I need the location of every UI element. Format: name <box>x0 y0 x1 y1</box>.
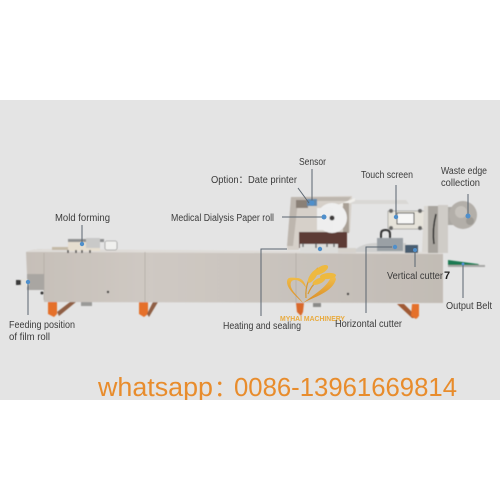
leader: paper roll <box>282 216 323 218</box>
label: waste edge collection line 2: collection <box>441 178 480 189</box>
leader: horizontal cutter <box>366 247 392 313</box>
brand logo <box>280 263 345 323</box>
photo background band <box>0 100 500 400</box>
leader: mold forming <box>81 225 83 243</box>
label: medical dialysis paper roll: Medical Dialysis Paper roll <box>171 213 274 224</box>
leader lines with blue markers <box>28 169 468 316</box>
phone number: 0086-13961669814 <box>234 374 457 402</box>
leader: feeding position <box>27 282 29 315</box>
label: horizontal cutter: Horizontal cutter <box>335 319 403 330</box>
label: output belt: Output Belt <box>446 301 492 312</box>
label: feeding position: Feeding position <box>9 320 75 331</box>
logo heart <box>287 274 336 303</box>
panel seams <box>44 252 296 303</box>
white lower band <box>0 400 500 500</box>
body screws <box>40 291 349 295</box>
logo wordmark: MYHAI MACHINERY <box>280 316 345 323</box>
sealing station frame <box>287 196 409 253</box>
leader: vertical cutter <box>414 250 416 267</box>
whatsapp contact <box>97 374 457 402</box>
leader: touch screen <box>395 185 397 217</box>
label: waste edge collection: Waste edge <box>441 166 487 177</box>
label: heating and sealing: Heating and sealing <box>223 321 301 332</box>
label: sensor: Sensor <box>299 157 327 168</box>
label: option date printer: Option：Date printer <box>211 175 298 186</box>
top rail <box>26 249 443 254</box>
leader: sensor <box>311 169 313 202</box>
label: vertical cutter: Vertical cutter <box>387 271 444 282</box>
output belt <box>448 260 485 267</box>
label: touch screen: Touch screen <box>361 170 413 181</box>
label: mold forming: Mold forming <box>55 213 110 224</box>
leader: date printer <box>298 188 309 203</box>
blue marker dots <box>26 200 471 284</box>
waste edge collection unit <box>422 201 477 253</box>
mold forming unit <box>52 238 117 253</box>
leader: output belt <box>462 264 464 298</box>
callout labels <box>9 157 492 343</box>
touch screen panel <box>388 209 425 230</box>
film roll feeder <box>16 274 44 290</box>
horizontal cutter unit <box>356 230 418 253</box>
leader: waste edge <box>467 194 469 216</box>
logo wheat <box>306 263 336 298</box>
leader: heating and sealing <box>261 249 287 316</box>
whatsapp word: whatsapp <box>97 374 213 402</box>
machine base body <box>26 249 443 303</box>
machine photo <box>16 196 485 319</box>
label: of film roll: of film roll <box>9 332 50 343</box>
orange legs <box>48 302 419 319</box>
stray mark: 7 <box>444 270 450 282</box>
colon: ： <box>214 375 237 401</box>
